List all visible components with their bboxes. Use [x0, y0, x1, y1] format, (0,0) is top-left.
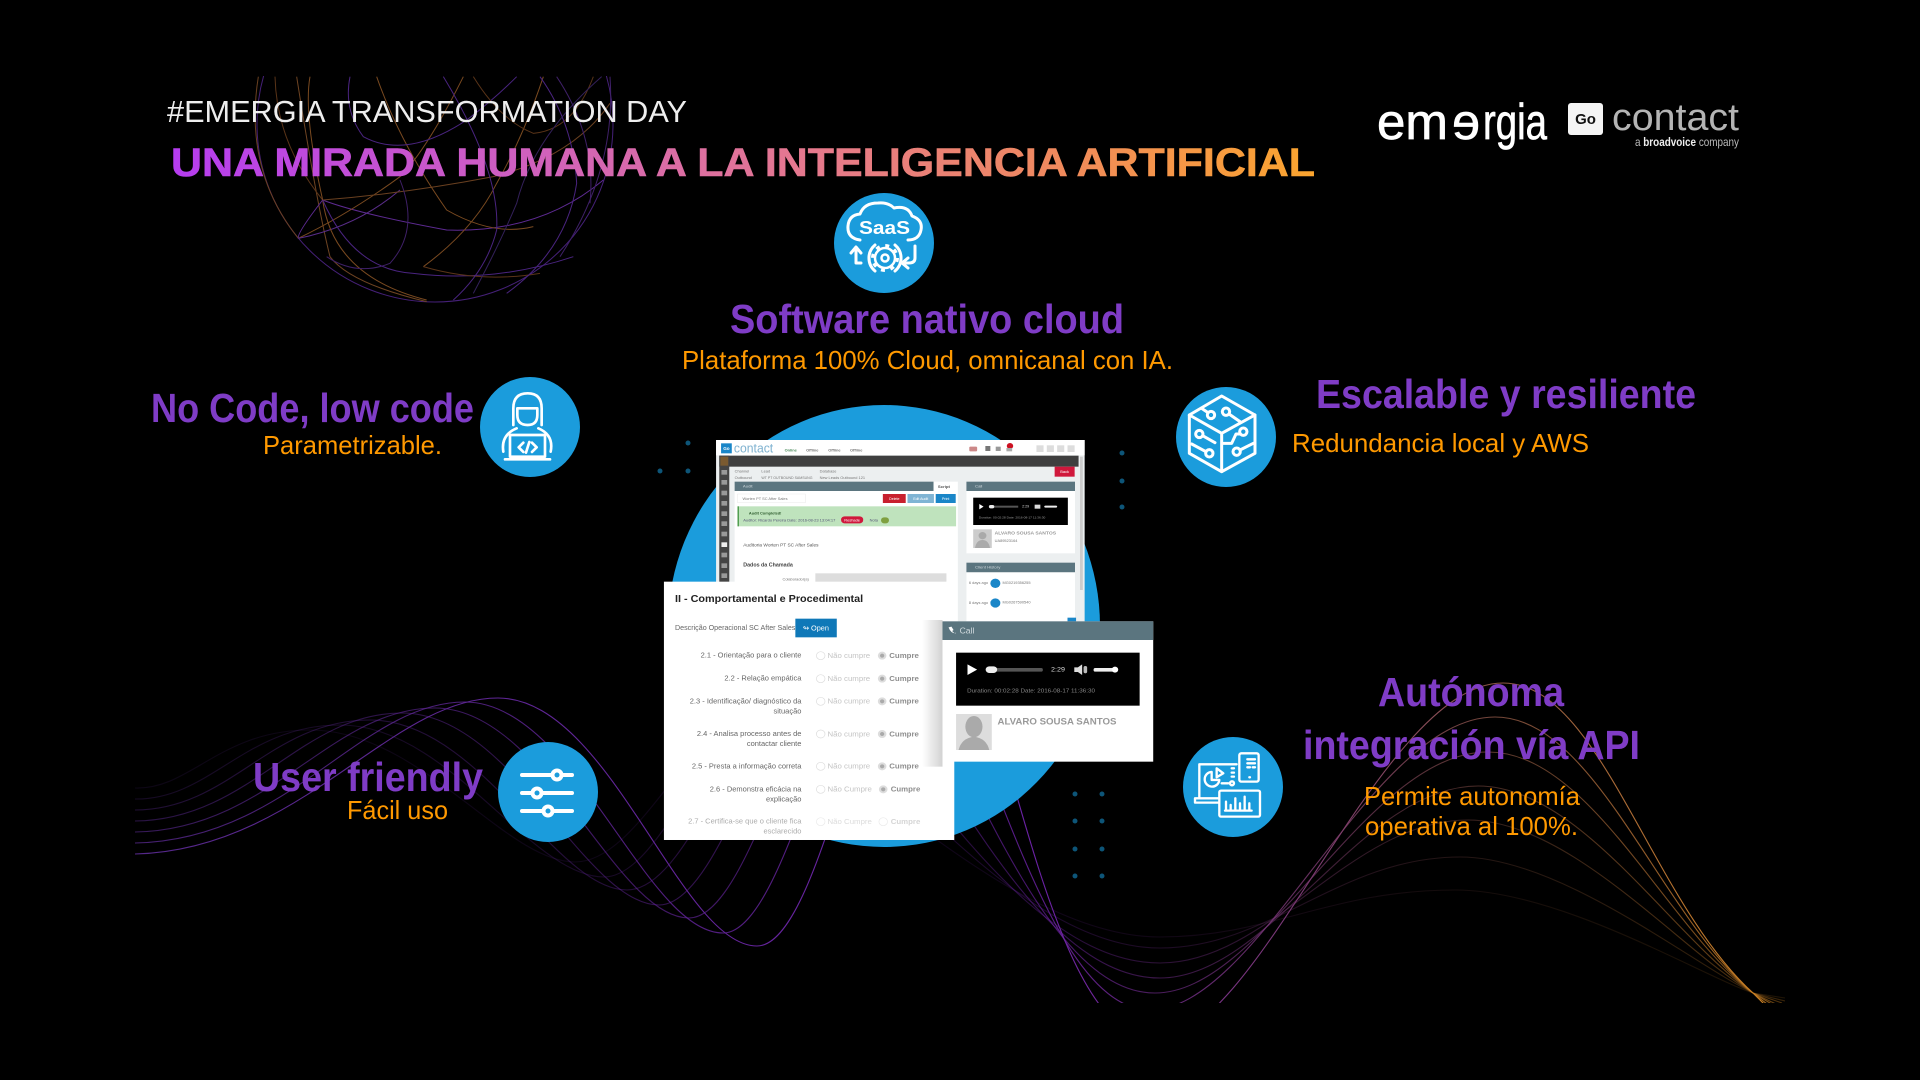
panel: call player: ALVARO SOUSA SANTOS	[997, 717, 1117, 727]
panel: main audit window: Audit	[743, 484, 753, 489]
panel: call player	[942, 621, 1153, 762]
panel: main audit window: Online	[785, 449, 797, 453]
panel: behaviour checklist: 2.4 - Analisa processo antes de	[697, 729, 801, 738]
panel: main audit window: Dados da Chamada	[743, 562, 793, 568]
panel: behaviour checklist: esclarecido	[764, 827, 801, 836]
logo: emergia: rgia	[1483, 94, 1547, 150]
logo: GoContact: Go	[1575, 111, 1596, 128]
panel: behaviour checklist: contactar cliente	[747, 739, 801, 748]
logo: emergia: e	[1452, 94, 1480, 150]
panel: behaviour checklist: Cumpre	[889, 730, 919, 738]
panel: behaviour checklist: 2.3 - Identificação/ diagnóstico da	[690, 697, 802, 705]
panel: behaviour checklist: Cumpre	[889, 697, 919, 706]
panel: behaviour checklist: Não cumpre	[827, 674, 870, 683]
heading: autonoma API: integración vía API	[1303, 722, 1640, 768]
panel: behaviour checklist: 2.2 - Relação empática	[724, 674, 802, 683]
icon: SaaS cloud: SaaS	[859, 218, 910, 238]
panel: call player: 2:29	[1051, 667, 1065, 674]
panel: main audit window: Nota	[870, 518, 879, 522]
panel: main audit window: Colaborador(a)	[782, 577, 810, 581]
heading: no code	[151, 385, 474, 460]
teal dots	[658, 440, 1124, 878]
panel: main audit window: Offline	[806, 449, 818, 453]
panel: behaviour checklist: Não cumpre	[827, 762, 870, 771]
logo: GoContact: a broadvoice company	[1635, 135, 1739, 149]
panel: main audit window: 2:29	[1022, 505, 1029, 509]
heading: software cloud: Software nativo cloud	[730, 296, 1124, 342]
panel: main audit window: Channel	[735, 469, 749, 473]
heading: software cloud: Plataforma 100% Cloud, omnicanal con IA.	[682, 345, 1173, 375]
decorative waves	[135, 682, 1785, 1003]
panel: behaviour checklist: Cumpre	[889, 674, 919, 683]
heading: user friendly	[253, 754, 483, 825]
panel: behaviour checklist: Cumpre	[891, 817, 920, 826]
panel: main audit window: Database	[820, 469, 836, 473]
panel: behaviour checklist: situação	[773, 707, 801, 716]
panel: behaviour checklist: Não cumpre	[827, 730, 870, 738]
panel: behaviour checklist: 2.7 - Certifica-se que o cliente fica	[688, 817, 802, 826]
logo: GoContact: contact	[1612, 97, 1739, 139]
panel: main audit window: Call	[975, 484, 982, 489]
panel: main audit window: Duration: 00:02:28 Date: 2016-08-17 11:36:30	[979, 516, 1046, 520]
panel: behaviour checklist: Cumpre	[889, 762, 919, 771]
panel: behaviour checklist: 2.6 - Demonstra eficácia na	[710, 785, 802, 793]
heading: escalable	[1292, 371, 1696, 458]
panel: main audit window: Auditoria Worten PT SC After Sales	[743, 543, 819, 549]
icon: no-code developer	[480, 377, 580, 477]
panel: behaviour checklist: Descrição Operacional SC After Sales	[675, 623, 796, 632]
panel: main audit window: Outbound	[735, 476, 752, 480]
panel: behaviour checklist: 2.1 - Orientação para o cliente	[701, 651, 801, 660]
panel: main audit window: UA89523164	[995, 539, 1017, 543]
panel: behaviour checklist: explicação	[766, 795, 801, 803]
heading: escalable: Escalable y resiliente	[1316, 371, 1696, 417]
panel: behaviour checklist: 2.5 - Presta a informação correta	[692, 762, 802, 770]
panel: call player: Call	[960, 626, 975, 635]
heading: autonoma API: Autónoma	[1378, 669, 1565, 715]
panel: behaviour checklist: II - Comportamental e Procedimental	[675, 594, 863, 605]
main title: UNA MIRADA HUMANA A LA INTELIGENCIA ARTIFICIAL	[171, 141, 1315, 185]
icon: sliders	[498, 742, 598, 842]
panel: main audit window: WT PT OUTBOUND SAMSUNG	[761, 476, 813, 480]
panel: behaviour checklist: Cumpre	[889, 651, 919, 660]
icon: devices dashboard	[1183, 737, 1283, 837]
heading: user friendly: User friendly	[253, 754, 483, 800]
logo: GoContact	[1568, 97, 1739, 149]
panel: main audit window: Back	[1060, 470, 1069, 474]
panel: main audit window: Reshade	[844, 518, 860, 522]
panel: main audit window: New Leads Outbound 121	[820, 476, 865, 480]
panel: main audit window: Worten PT SC After Sales	[742, 497, 788, 501]
panel: main audit window: 8 days ago	[969, 601, 988, 605]
panel: main audit window: Client History	[975, 565, 1001, 570]
panel: main audit window: Offline	[850, 449, 862, 453]
heading: autonoma API: operativa al 100%.	[1365, 811, 1578, 841]
heading: software cloud	[682, 296, 1173, 375]
panel: main audit window: Script	[938, 484, 951, 489]
panel: main audit window: Auditor: Ricardo Pereira Date: 2016-08-23 13:04:17	[743, 518, 835, 522]
panel: main audit window: Go	[723, 446, 730, 451]
panel: main audit window: Print	[942, 497, 949, 501]
panel: call player: Duration: 00:02:28 Date: 2016-08-17 11:36:30	[967, 689, 1096, 695]
logo: emergia: em	[1377, 94, 1448, 150]
logo: emergia	[1377, 94, 1547, 150]
panel: main audit window: Offline	[828, 449, 841, 453]
heading: user friendly: Fácil uso	[347, 795, 448, 825]
heading: no code: Parametrizable.	[263, 430, 442, 460]
event hashtag title: #EMERGIA TRANSFORMATION DAY	[167, 94, 687, 129]
panel: main audit window: ALVARO SOUSA SANTOS	[995, 531, 1057, 537]
panel: main audit window: Audit Completed!	[749, 511, 782, 515]
icon: SaaS cloud	[834, 193, 934, 293]
heading: autonoma API	[1303, 669, 1640, 841]
panel: main audit window: MG0219356255	[1002, 581, 1031, 585]
icon: circuit cube	[1176, 387, 1276, 487]
panel: main audit window	[716, 440, 1085, 622]
panel: behaviour checklist: ↬ Open	[803, 624, 829, 633]
panel: behaviour checklist: Não cumpre	[827, 651, 870, 660]
decorative globe	[254, 76, 614, 302]
panel: behaviour checklist: Não Cumpre	[827, 785, 872, 794]
big blue circle	[668, 405, 1100, 847]
heading: escalable: Redundancia local y AWS	[1292, 428, 1589, 458]
panel: main audit window: 6 days ago	[969, 581, 988, 585]
panel: main audit window: Lead	[761, 469, 770, 473]
panel: behaviour checklist: Cumpre	[891, 785, 920, 794]
panel: main audit window: MG0267590540	[1002, 601, 1031, 605]
software screenshots	[664, 440, 1153, 840]
panel: behaviour checklist: Não cumpre	[827, 697, 870, 706]
heading: autonoma API: Permite autonomía	[1364, 781, 1581, 811]
panel: main audit window: contact	[734, 441, 774, 455]
heading: no code: No Code, low code	[151, 385, 474, 431]
panel: behaviour checklist	[664, 582, 954, 840]
panel: main audit window: Edit Audit	[913, 497, 928, 501]
panel: main audit window: Delete	[889, 497, 900, 501]
panel: behaviour checklist: Não Cumpre	[827, 817, 872, 826]
